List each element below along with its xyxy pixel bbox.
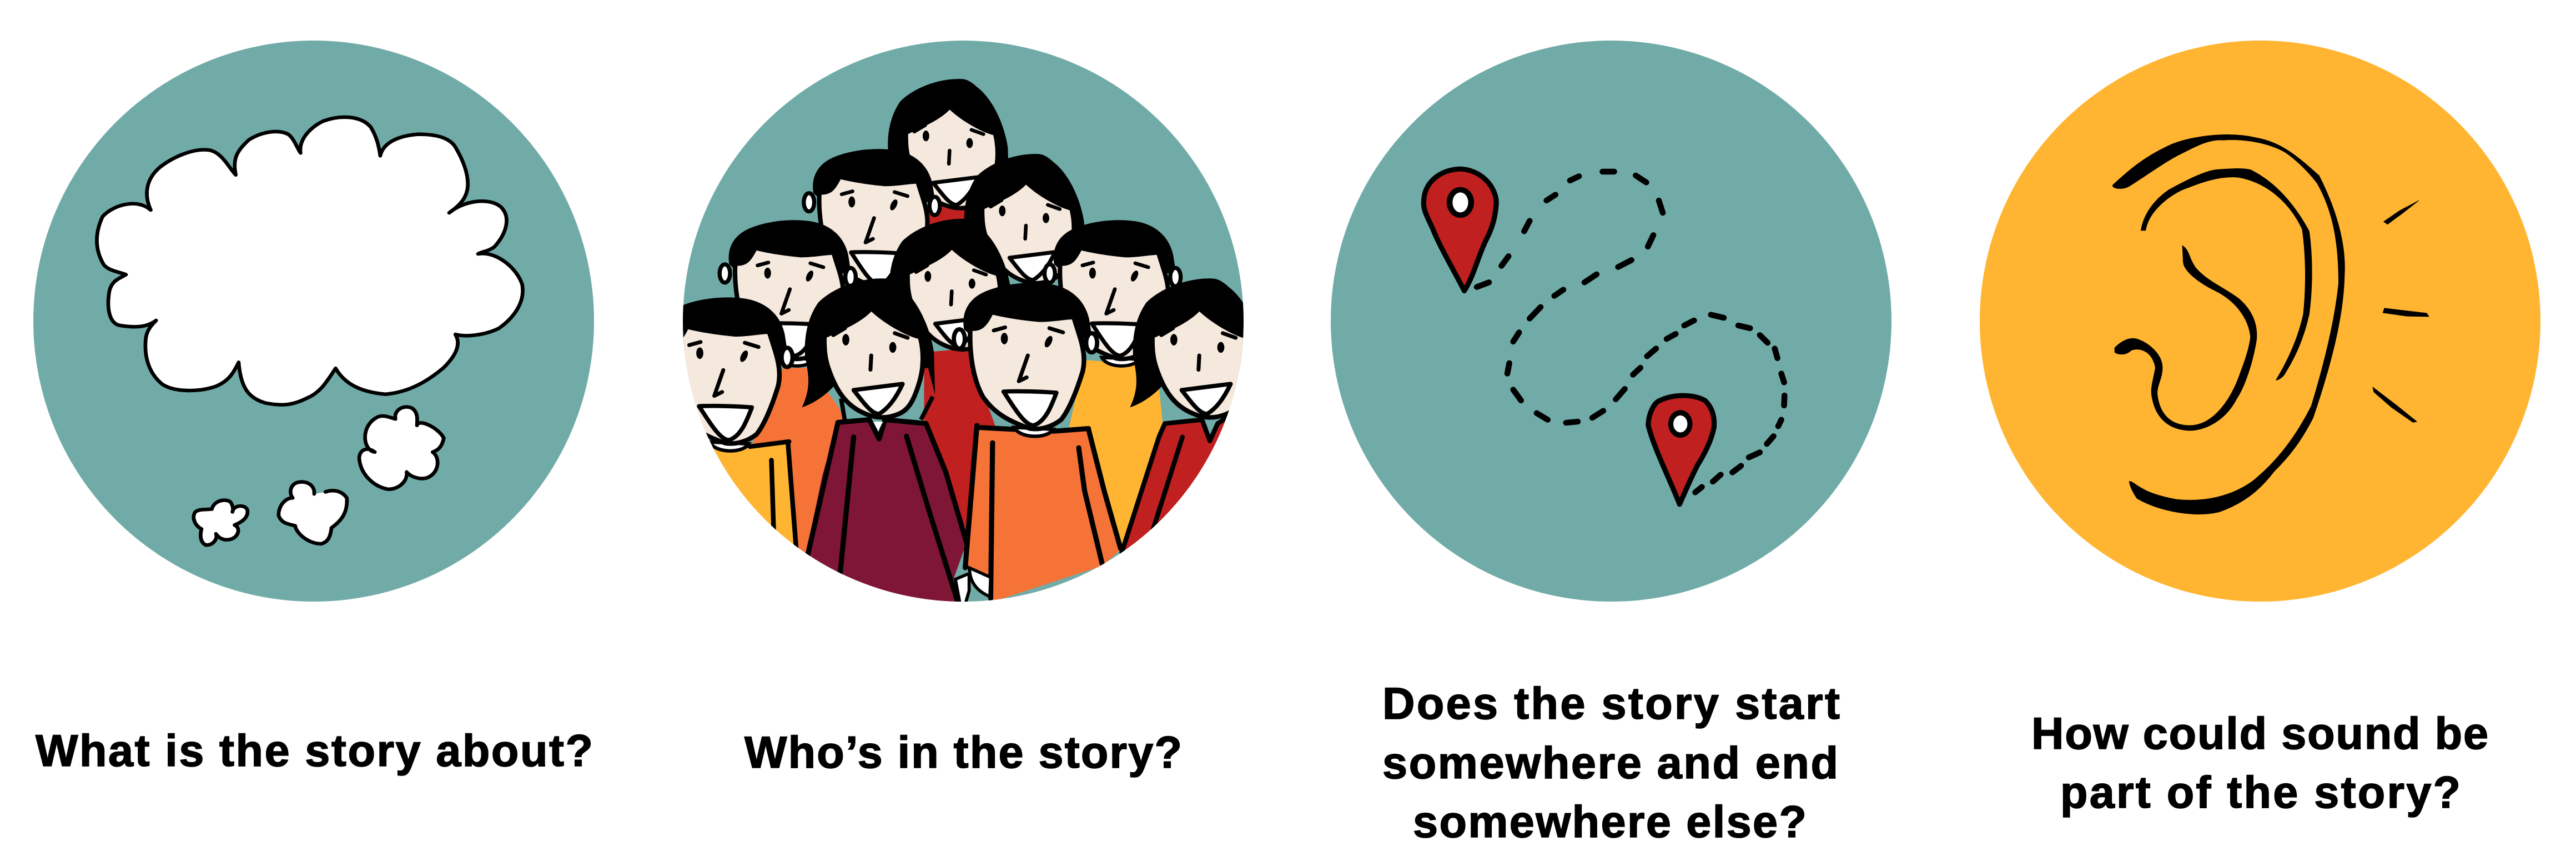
heading: does the story start somewhere: Does the story start <box>1382 679 1840 729</box>
icon: thought bubble <box>97 117 523 545</box>
second row woman <box>962 154 1085 283</box>
panel: start and end <box>1331 41 1891 602</box>
third row left man <box>720 220 856 366</box>
panel: what is the story about <box>33 41 594 602</box>
panel: who's in the story <box>683 41 1244 602</box>
front left man shirt <box>705 442 797 554</box>
panel: sound <box>1980 41 2540 602</box>
center woman shirt <box>924 348 997 560</box>
yellow circle <box>1980 41 2540 602</box>
heading: what is the story about: What is the story about? <box>36 726 593 776</box>
outer ear <box>2112 134 2344 514</box>
third row right man shirt <box>1069 360 1163 545</box>
heading: how could sound be part of the story <box>2031 709 2488 818</box>
heading: who's in the story: Who’s in the story? <box>744 728 1182 778</box>
front left man <box>683 297 794 453</box>
teal circle <box>1331 41 1891 602</box>
start pin <box>1423 169 1496 291</box>
heading: does the story start somewhere: somewhere else? <box>1413 797 1807 847</box>
sound line bottom <box>2373 387 2417 422</box>
inner fold <box>2141 168 2312 380</box>
medium puff <box>279 482 347 544</box>
center man hands <box>955 568 990 604</box>
heading: how could sound be part of the story: part of the story? <box>2060 768 2461 818</box>
front woman maroon shirt <box>804 420 967 610</box>
back woman <box>885 79 1009 208</box>
front right woman shirt <box>1119 414 1228 554</box>
inner ear curve <box>2115 246 2257 431</box>
center woman <box>887 219 1012 349</box>
dashed route <box>1477 172 1784 492</box>
large puff <box>359 407 444 489</box>
front woman neck <box>841 397 933 422</box>
heading: does the story start somewhere <box>1382 679 1840 847</box>
front right woman <box>1130 278 1244 420</box>
sound line middle <box>2383 308 2429 317</box>
end pin <box>1648 396 1714 504</box>
icon: ear with sound lines <box>2112 134 2429 514</box>
illustration: crowd of people <box>683 79 1244 602</box>
heading: how could sound be part of the story: How could sound be <box>2031 709 2488 759</box>
center man <box>954 283 1097 436</box>
teal circle <box>683 41 1244 602</box>
illustration: map route <box>1423 169 1784 504</box>
main cloud <box>97 117 523 405</box>
third row right man <box>1044 220 1181 366</box>
center man orange shirt <box>965 426 1122 602</box>
small puff <box>194 500 248 545</box>
sound line top <box>2383 201 2419 224</box>
teal circle <box>33 41 594 602</box>
second row man <box>804 149 940 295</box>
heading: does the story start somewhere: somewhere and end <box>1382 738 1838 788</box>
front woman <box>802 278 935 417</box>
third row left man shirt <box>752 368 846 560</box>
back woman shirt <box>928 206 965 224</box>
